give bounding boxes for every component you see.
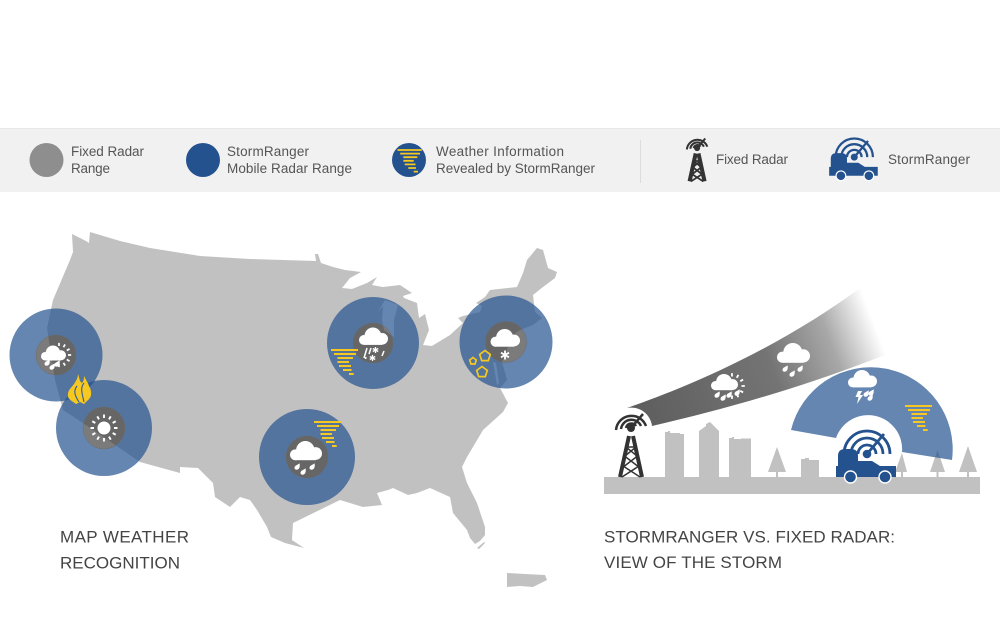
- radar range circles: [10, 296, 552, 505]
- icon: tornado, south: [314, 422, 341, 446]
- heading: map weather recognition: [60, 528, 189, 572]
- heading: StormRanger vs fixed radar: STORMRANGER VS. FIXED RADAR:: [604, 528, 895, 546]
- icon: cloud with rain in beam: [777, 343, 810, 377]
- legend: StormRanger mobile radar range: StormRanger: [227, 144, 310, 159]
- icon: cloud with wintry mix, midwest: [359, 328, 388, 361]
- legend band: [0, 128, 1000, 192]
- StormRanger radar sector: [791, 367, 953, 460]
- panel: StormRanger vs fixed radar: [604, 283, 980, 572]
- legend: weather information revealed: Weather Information: [436, 144, 564, 159]
- fixed radar beam: [627, 283, 890, 426]
- icon: fixed radar tower: [616, 414, 646, 477]
- fixed radar inner circles: [36, 322, 526, 478]
- heading: map weather recognition: MAP WEATHER: [60, 528, 189, 546]
- panel: map weather recognition: [10, 232, 557, 587]
- legend: StormRanger truck: [829, 139, 970, 181]
- icon: hail pentagons: [470, 350, 490, 377]
- legend: fixed radar range: Range: [71, 161, 110, 176]
- icon: tornado, midwest: [331, 350, 358, 374]
- icon: cloud with sun and rain in beam: [711, 373, 745, 401]
- legend: fixed radar: Fixed Radar: [716, 152, 788, 167]
- icon: cloud with sun and rain, west coast: [41, 343, 71, 370]
- icon: storm cloud with lightning: [848, 370, 877, 404]
- trees: [768, 446, 977, 477]
- legend: StormRanger truck: StormRanger: [888, 152, 970, 167]
- heading: StormRanger vs fixed radar: [604, 528, 895, 572]
- legend: fixed radar range: [30, 143, 144, 177]
- US map: [47, 232, 557, 587]
- heading: map weather recognition: RECOGNITION: [60, 554, 180, 572]
- legend: fixed radar range: Fixed Radar: [71, 144, 144, 159]
- legend: StormRanger mobile radar range: Mobile Radar Range: [227, 161, 352, 176]
- legend: StormRanger mobile radar range: [186, 143, 352, 177]
- icon: fire: [68, 374, 91, 404]
- legend: fixed radar: [687, 139, 788, 181]
- legend: weather information revealed: [392, 143, 596, 177]
- icon: cloud with rain, south: [290, 441, 322, 475]
- icon: sun, southwest: [90, 414, 118, 442]
- heading: StormRanger vs fixed radar: VIEW OF THE STORM: [604, 553, 782, 572]
- icon: StormRanger truck: [836, 431, 896, 483]
- city skyline: [665, 422, 819, 477]
- legend: weather information revealed: Revealed by StormRanger: [436, 161, 596, 176]
- ground: [604, 477, 980, 494]
- icon: cloud with snow, northeast: [490, 329, 520, 360]
- icon: tornado in radar sector: [905, 406, 932, 430]
